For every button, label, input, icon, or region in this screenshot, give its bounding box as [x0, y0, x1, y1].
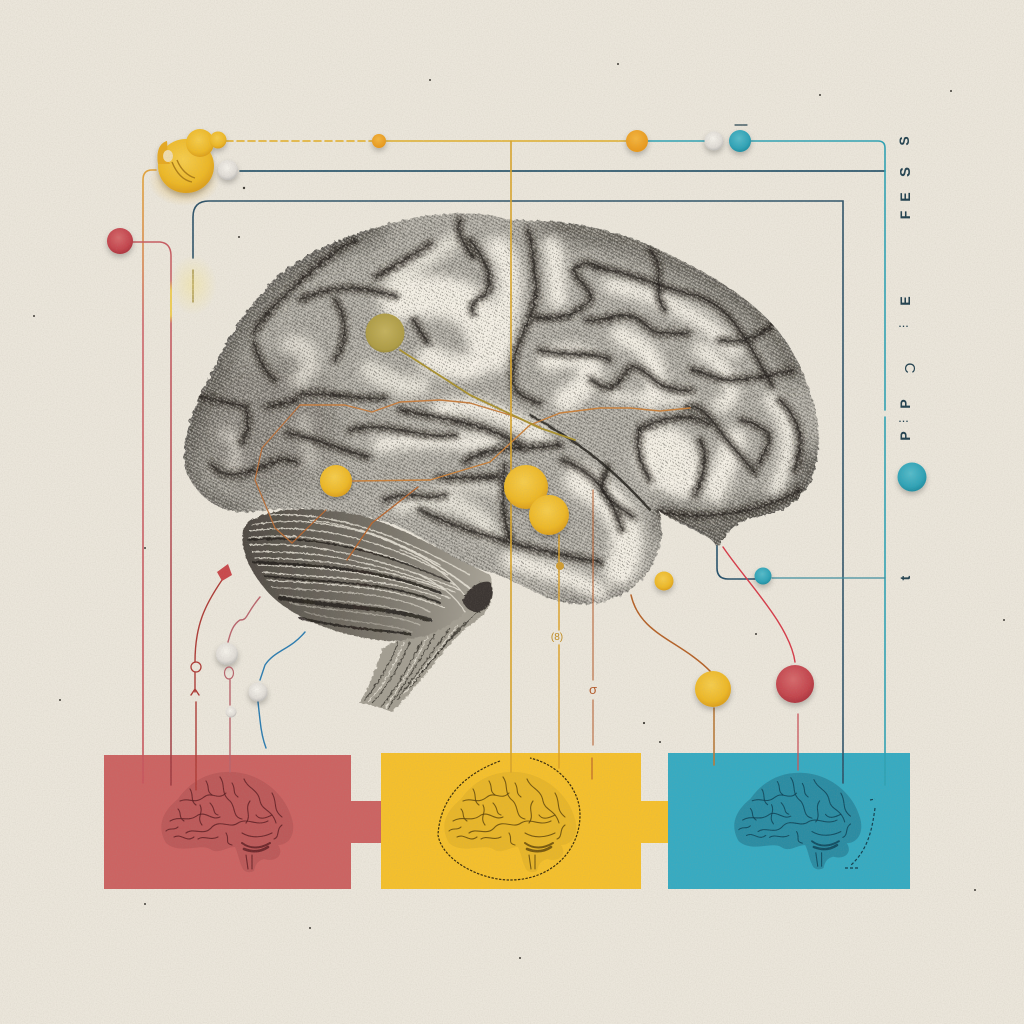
cerebrum [182, 212, 820, 606]
line: central yellow vertical [510, 141, 512, 772]
node: olive on brain [366, 314, 404, 352]
right side rotated labels: F [897, 210, 913, 219]
node: small yellow below temporal [654, 572, 674, 590]
tick in top right [735, 124, 747, 126]
node: teal top [729, 130, 751, 152]
node balls [107, 130, 926, 718]
yellow dash on navy rail [192, 270, 194, 302]
line: navy hook [717, 545, 755, 579]
line: rust vertical [592, 490, 593, 779]
line: red curve [723, 547, 795, 662]
node: yellow frontal [320, 465, 352, 497]
node: yellow lower [695, 671, 731, 707]
dark rim shading [184, 225, 818, 604]
network connector lines [133, 125, 885, 790]
right side rotated labels: E [897, 296, 913, 306]
node: teal small lower right [754, 568, 772, 584]
node: white left medium [248, 682, 268, 702]
line: orange curve [631, 595, 711, 672]
right side rotated labels: E [897, 192, 913, 202]
small glyph labels on verticals: (8) [551, 632, 563, 643]
icon: big yellow blob node [148, 129, 226, 206]
line: outer navy frame [193, 201, 843, 783]
light gyri [222, 240, 788, 592]
brainstem [359, 582, 493, 712]
small glyph labels on verticals [551, 632, 597, 697]
node: tiny yellow on temporal [556, 562, 564, 570]
node: white top [704, 132, 724, 150]
panel: blue box [668, 753, 910, 889]
panel: yellow box with connector tab [381, 753, 668, 889]
line: teal to right rail [772, 577, 885, 579]
icon: red arrow tip [217, 564, 232, 581]
node: white left large [216, 643, 238, 665]
right side rotated labels: S [897, 167, 914, 177]
node: pink loop [224, 667, 234, 679]
node: white left small [226, 706, 236, 718]
line: yellow dashed top [226, 140, 373, 142]
right side rotated labels: C [901, 363, 918, 374]
node: ring red [191, 662, 201, 672]
line: yellow from temporal [558, 535, 560, 768]
right side rotated labels: t [897, 575, 913, 580]
line: yellow top solid [385, 140, 627, 142]
right side rotated labels: P [897, 431, 913, 441]
line: orange to red left rail [143, 170, 156, 783]
right side rotated labels [896, 136, 918, 580]
right side rotated labels: P [897, 399, 913, 409]
right side rotated labels: ... [899, 414, 909, 424]
halftone stipple overlay [183, 212, 820, 605]
node: red left [107, 228, 133, 254]
cerebellum [242, 509, 492, 641]
mid-tone shade left lobe [190, 355, 340, 495]
icon: blue box brain [734, 773, 861, 869]
node: white near blob [218, 160, 238, 180]
line: red ball rail [133, 242, 171, 785]
node: yellow pair temporal [504, 465, 569, 535]
pathway traces on brain [255, 350, 690, 560]
dashed trace in blue box [845, 799, 875, 868]
right side rotated labels: ... [899, 319, 909, 329]
dashed oval around yellow brain [438, 758, 580, 880]
line: orange below ball [713, 708, 715, 765]
node: teal right [898, 462, 926, 492]
icon: red box brain [161, 772, 293, 872]
brain illustration [170, 200, 840, 712]
small glyph labels on verticals: σ [589, 682, 597, 697]
right side rotated labels: S [896, 136, 912, 146]
line: blue curve [258, 632, 305, 748]
node: small yellow top [372, 134, 386, 148]
line: pink curve [228, 597, 260, 772]
node: orange top [626, 130, 648, 152]
soft sulci shadows [199, 220, 800, 562]
node: red lower [776, 665, 814, 703]
icon: yellow box brain [444, 772, 576, 872]
line: red-left curve with ring [191, 580, 222, 790]
line: teal top and right rail [648, 141, 885, 785]
main lateral fissure [530, 415, 650, 510]
panel: red box with connector tab [104, 755, 381, 889]
line: navy second rail [240, 170, 885, 172]
line: red below ball [797, 714, 799, 770]
sharp sulci [199, 220, 800, 562]
glow near yellow tick [169, 255, 217, 315]
vertical lines crossing the brain [511, 141, 593, 779]
